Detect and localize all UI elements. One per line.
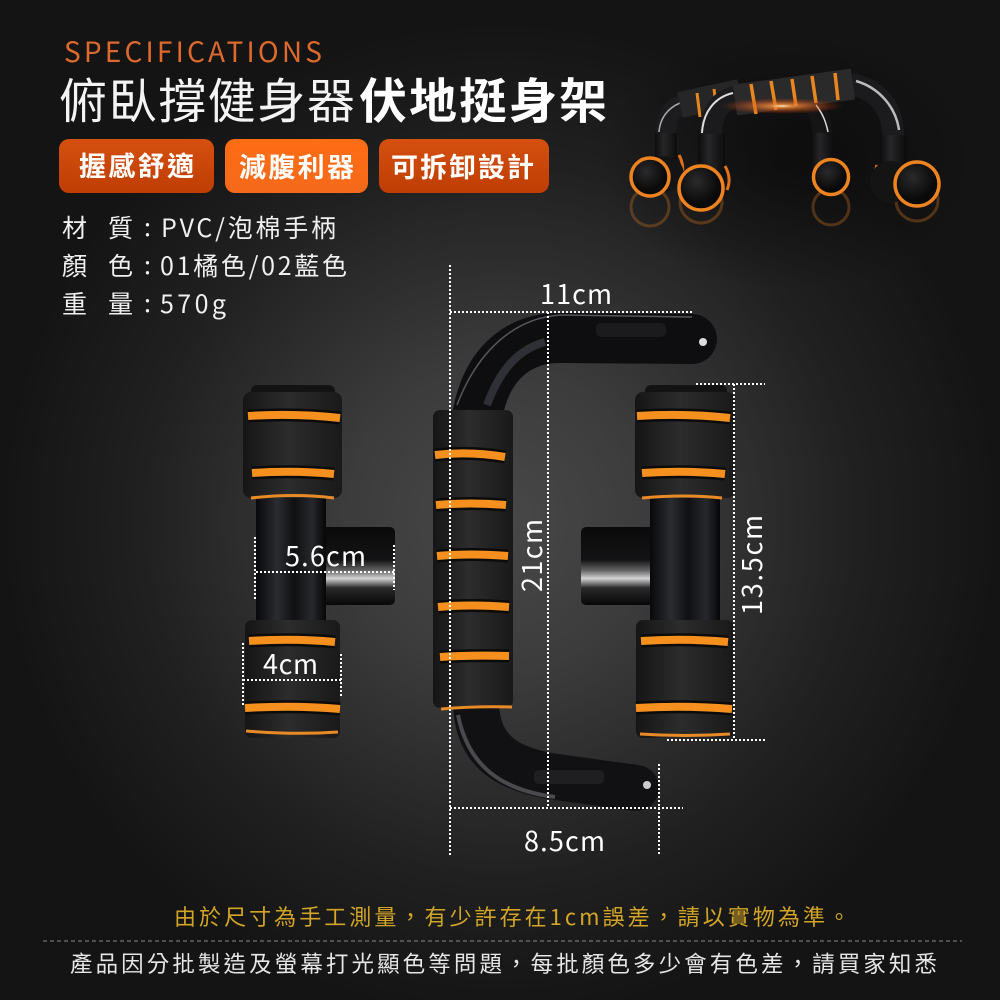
product part: curved handle with foam grip (433, 315, 707, 797)
product photo: assembled push-up stand (600, 30, 980, 290)
feature tag: 減腹利器 (225, 139, 368, 193)
vertical tube (650, 495, 720, 623)
dimension label: 8.5cm: 8.5cm (524, 820, 605, 859)
spec list: 顏 (62, 247, 87, 283)
spec list: PVC/泡棉手柄 (161, 209, 336, 245)
dimension label: 11cm: 11cm (540, 273, 612, 312)
reflections (631, 179, 938, 226)
product part: left T-joint with foam (243, 385, 395, 738)
spec list (62, 208, 347, 321)
spec list: 量 (108, 285, 133, 321)
dimension label: 5.6cm: 5.6cm (285, 535, 366, 574)
rear tube arcs (666, 103, 685, 135)
heading: SPECIFICATIONS: SPECIFICATIONS (64, 31, 322, 71)
note: color difference disclaimer: 產品因分批製造及螢幕打光顯色等問題，每批顏色多少會有色差，請買家知悉 (70, 947, 937, 979)
legs (655, 133, 677, 173)
spec list: : (144, 208, 151, 244)
dimension label: 13.5cm: 13.5cm (731, 515, 770, 615)
title: 俯臥撐健身器 (59, 62, 355, 132)
spec list: : (144, 246, 151, 282)
feature tag: 減腹利器: 減腹利器 (239, 146, 354, 185)
feature tag: 握感舒適: 握感舒適 (79, 145, 194, 184)
upper foam (645, 385, 727, 399)
title (59, 62, 607, 132)
front tube arcs (711, 96, 738, 135)
spec list: 01橘色/02藍色 (160, 247, 347, 283)
spec list: 色 (108, 247, 133, 283)
feature tag: 可拆卸設計 (379, 139, 549, 193)
title: 伏地挺身架 (359, 62, 607, 132)
lower foam (636, 620, 734, 738)
front foam grip (735, 84, 853, 100)
spec list: 材 (62, 209, 87, 245)
product part: right T-joint with foam (581, 385, 735, 738)
upper foam (251, 385, 335, 399)
spec list: : (144, 284, 151, 320)
feature tag: 可拆卸設計: 可拆卸設計 (391, 146, 534, 185)
lower tube (476, 705, 636, 788)
spec list: 重 (62, 285, 87, 321)
lower foam (245, 620, 340, 738)
spec list: 570g (160, 285, 226, 321)
rear foam grip (680, 92, 740, 105)
side socket (320, 527, 395, 605)
side socket (581, 527, 656, 605)
note: measurement tolerance: 由於尺寸為手工測量，有少許存在1cm誤差，請以實物為準。 (174, 900, 850, 932)
wheels (679, 155, 884, 191)
feature tag: 握感舒適 (59, 139, 214, 193)
spec list: 質 (108, 209, 133, 245)
dimension label: 4cm: 4cm (263, 643, 318, 682)
vertical tube (256, 495, 326, 623)
dimension label: 21cm: 21cm (511, 519, 550, 592)
dimension lines (243, 265, 765, 856)
upper tube (478, 338, 692, 412)
lens glow (720, 98, 844, 114)
foam segments (433, 410, 513, 708)
